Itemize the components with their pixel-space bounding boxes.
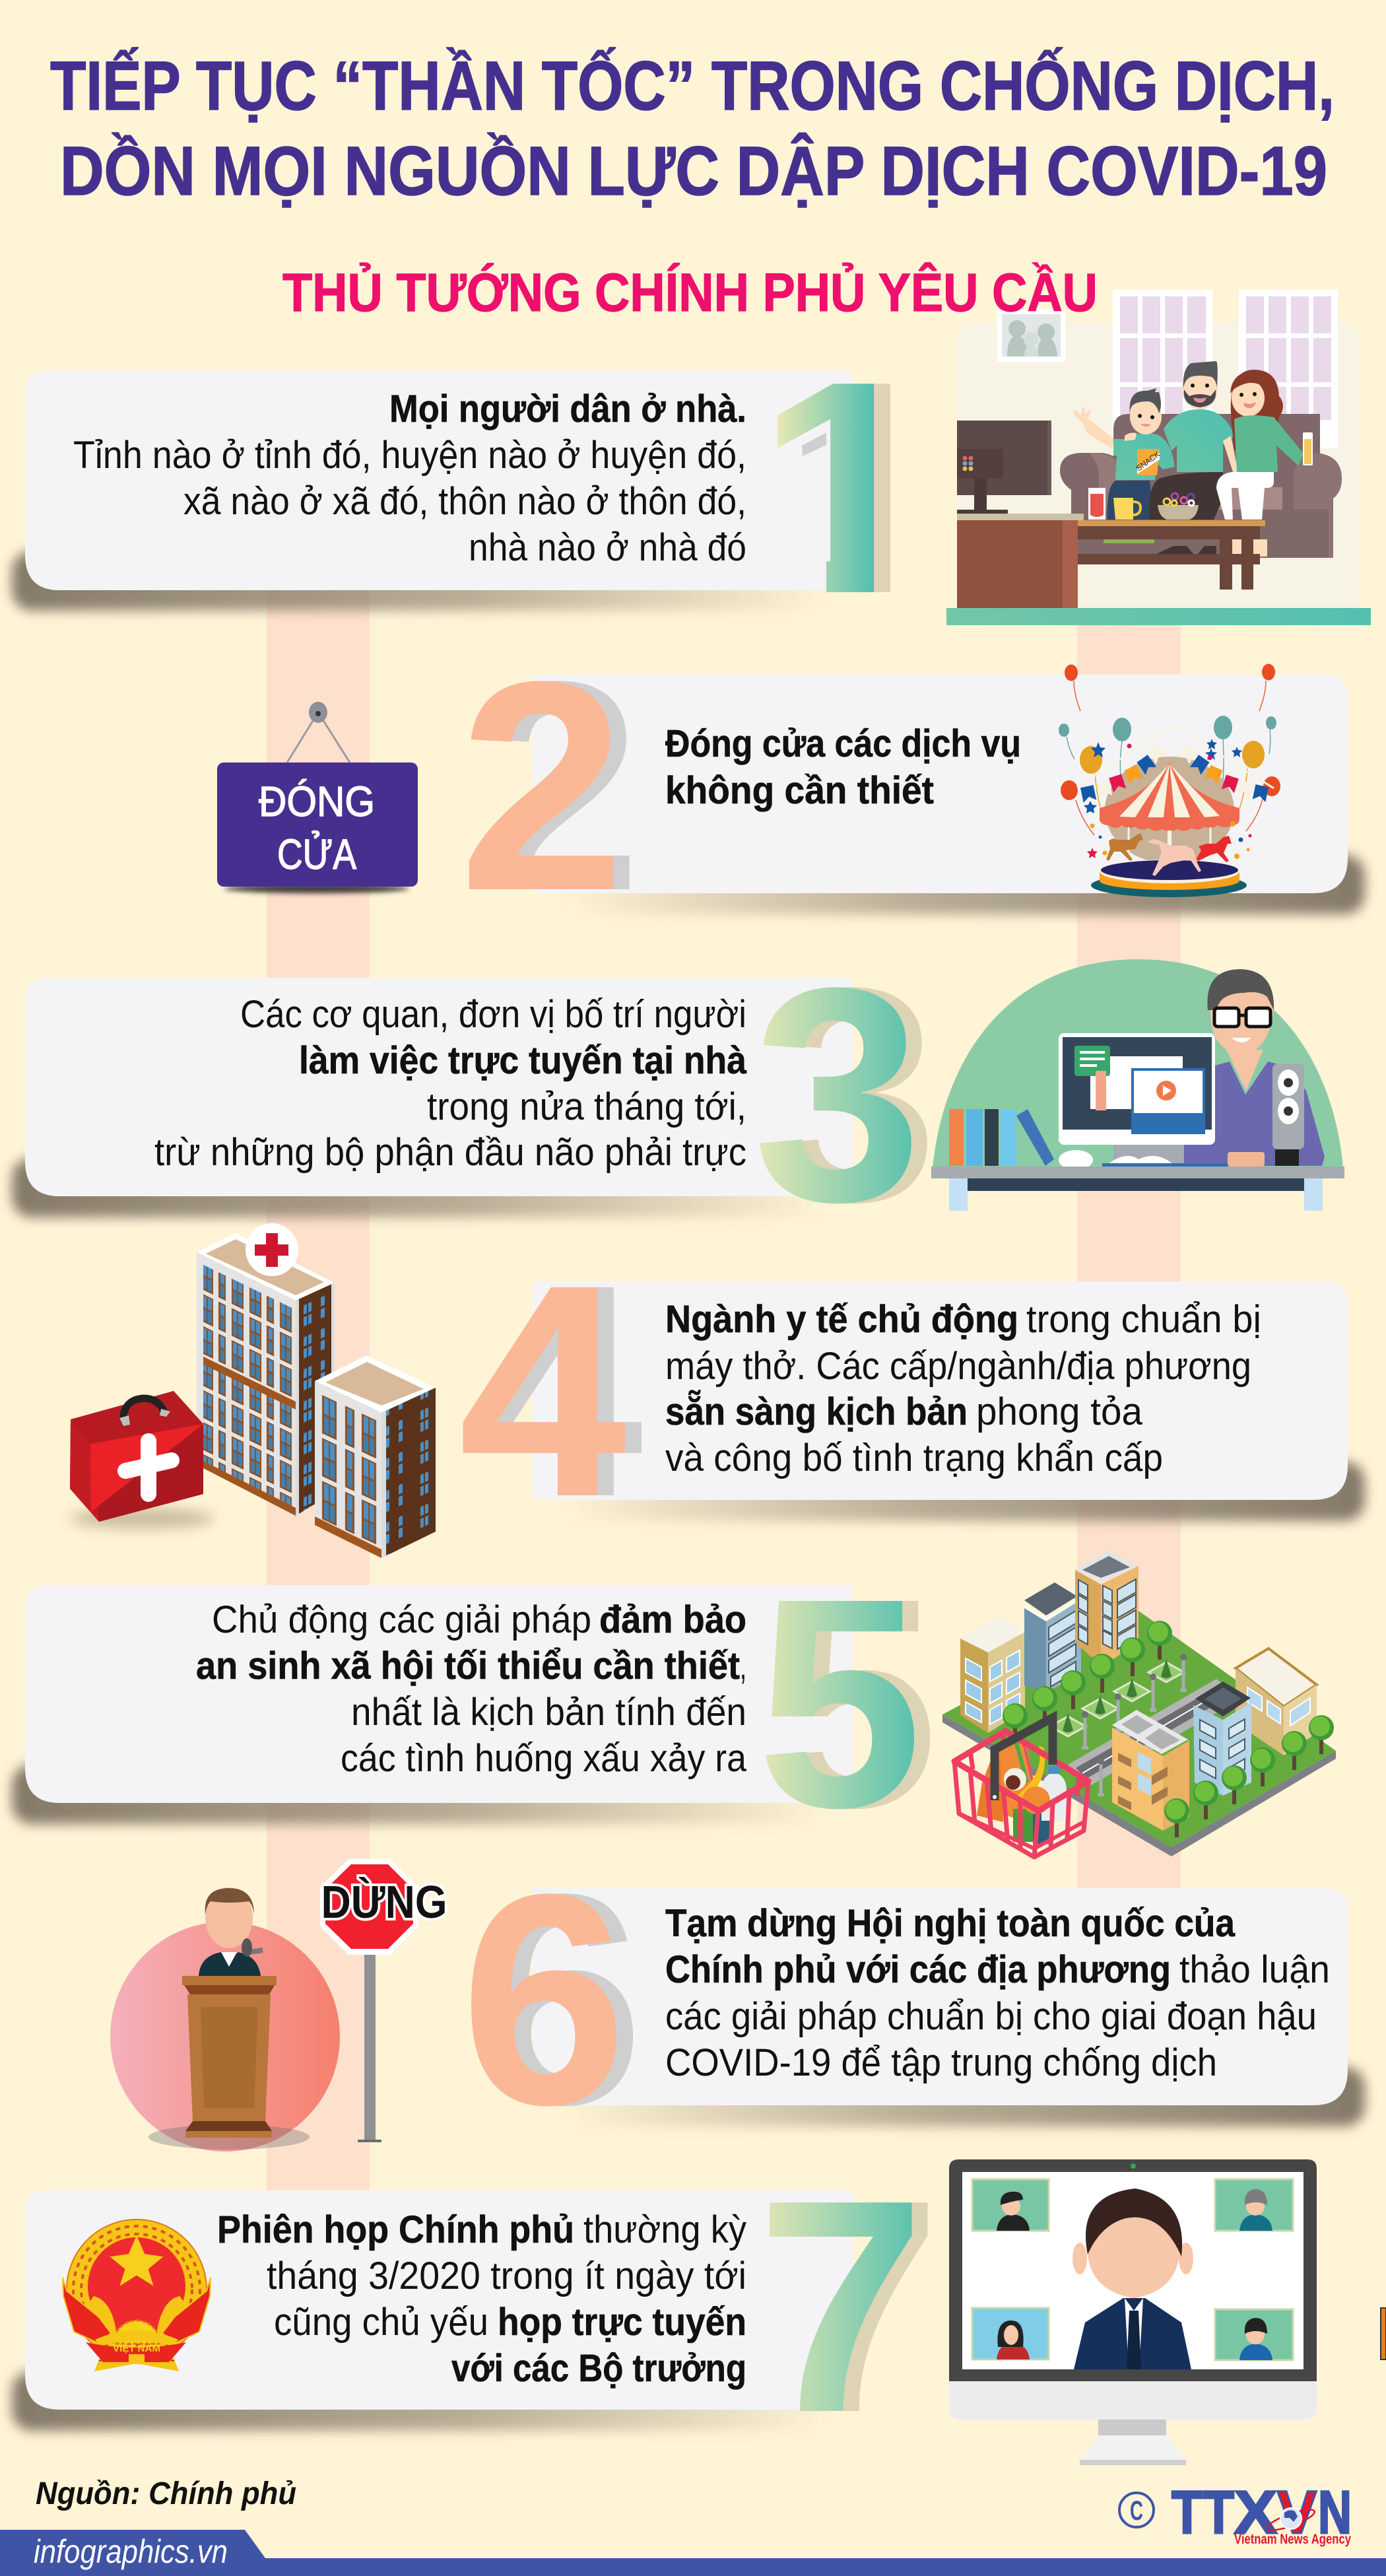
text 7: Phiên họp Chính phủ	[217, 2208, 574, 2251]
text 4: máy thở. Các cấp/ngành/địa phương	[665, 1345, 1251, 1388]
text 6	[665, 1902, 1330, 2084]
icon: stop sign: DỪNG	[321, 1876, 447, 1928]
logo TTXVN: T	[1172, 2479, 1203, 2546]
text 5	[196, 1598, 747, 1780]
logo TTXVN	[1119, 2479, 1352, 2547]
number 2: 2	[459, 619, 625, 953]
number 3: 3	[753, 924, 922, 1265]
text 4: và công bố tình trạng khẩn cấp	[665, 1437, 1163, 1479]
logo TTXVN: N	[1318, 2479, 1352, 2546]
national emblem	[63, 2220, 211, 2371]
text 5: ,	[740, 1644, 746, 1687]
text 1: Tỉnh nào ở tỉnh đó, huyện nào ở huyện đó,	[73, 434, 746, 477]
logo TTXVN: V	[1277, 2479, 1317, 2546]
text 3: làm việc trực tuyến tại nhà	[299, 1039, 747, 1082]
footer band: infographics.vn	[34, 2533, 228, 2570]
subtitle: THỦ TƯỚNG CHÍNH PHỦ YÊU CẦU	[282, 262, 1098, 323]
text 2: Đóng cửa các dịch vụ	[665, 722, 1021, 765]
number 6: 6	[460, 1832, 628, 2167]
text 5: Chủ động các giải pháp	[212, 1598, 591, 1641]
national emblem: VIỆT NAM	[113, 2342, 160, 2354]
number 7: 7	[772, 2137, 941, 2476]
footer band	[0, 2530, 1386, 2576]
icon: stop sign	[320, 1859, 447, 2142]
text 5: nhất là kịch bản tính đến	[351, 1691, 746, 1734]
text 5: đảm bảo	[599, 1598, 746, 1641]
text 5: an sinh xã hội tối thiểu cần thiết	[196, 1644, 740, 1687]
text 7: tháng 3/2020 trong ít ngày tới	[267, 2254, 746, 2297]
icon: speaker at podium	[110, 1887, 340, 2152]
text 2: không cần thiết	[665, 769, 934, 812]
text 6: Chính phủ với các địa phương	[665, 1948, 1171, 1991]
logo TTXVN: Vietnam News Agency	[1234, 2532, 1351, 2547]
number 2: 2	[475, 619, 642, 953]
text 1	[73, 388, 746, 569]
number 4: 4	[459, 1222, 628, 1560]
text 7	[217, 2208, 746, 2390]
number 4: 4	[475, 1222, 645, 1560]
icon: city and shopping basket	[942, 1550, 1336, 1857]
panel 4	[459, 1222, 1365, 1560]
text 1: nhà nào ở nhà đó	[469, 526, 746, 569]
logo TTXVN: T	[1203, 2479, 1234, 2546]
text 4	[665, 1298, 1261, 1479]
text 7: thường kỳ	[583, 2208, 746, 2251]
panel 6	[460, 1832, 1365, 2167]
text 1: Mọi người dân ở nhà.	[389, 388, 746, 430]
connector band right	[1077, 621, 1181, 1891]
text 4: Ngành y tế chủ động	[665, 1298, 1018, 1341]
icon: online worker	[931, 959, 1344, 1211]
illustration: family at home	[946, 290, 1371, 625]
panel 3	[12, 924, 938, 1265]
text 2	[665, 722, 1021, 812]
text 6: COVID-19 để tập trung chống dịch	[665, 2041, 1217, 2084]
text 4: trong chuẩn bị	[1026, 1298, 1261, 1341]
number 5: 5	[772, 1536, 939, 1870]
text 7: với các Bộ trưởng	[451, 2347, 746, 2390]
icon: carousel	[1059, 664, 1280, 897]
number 1	[777, 384, 890, 592]
text 7: họp trực tuyến	[498, 2301, 746, 2344]
text 3: trong nửa tháng tới,	[427, 1085, 746, 1128]
text 3	[154, 993, 747, 1174]
connector band left	[267, 590, 370, 2191]
text 3: trừ những bộ phận đầu não phải trực	[154, 1131, 746, 1174]
text 4: sẵn sàng kịch bản	[665, 1390, 968, 1433]
text 4: phong tỏa	[976, 1390, 1143, 1433]
number 3: 3	[769, 924, 938, 1265]
illustration: family at home: SNACK	[1135, 450, 1162, 473]
logo TTXVN: C	[1130, 2495, 1143, 2526]
text 6: thảo luận	[1179, 1948, 1330, 1991]
panel 1	[3, 371, 890, 619]
icon: closed sign	[217, 702, 418, 893]
number 5: 5	[756, 1536, 923, 1870]
icon: closed sign: ĐÓNG	[259, 778, 375, 825]
icon: video conference monitor	[949, 2159, 1317, 2465]
text 6: các giải pháp chuẩn bị cho giai đoạn hậu	[665, 1995, 1317, 2038]
number 7: 7	[756, 2137, 925, 2476]
number 1: 1	[750, 318, 942, 657]
edge decoration	[1381, 2308, 1386, 2359]
number 1: 1	[766, 318, 958, 657]
number 6: 6	[477, 1832, 644, 2167]
source: Nguồn: Chính phủ	[36, 2476, 296, 2511]
text 1: xã nào ở xã đó, thôn nào ở thôn đó,	[183, 480, 746, 523]
text 5: các tình huống xấu xảy ra	[341, 1737, 747, 1780]
text 6: Tạm dừng Hội nghị toàn quốc của	[665, 1902, 1236, 1945]
panel 5	[12, 1536, 939, 1870]
text 7: cũng chủ yếu	[274, 2301, 488, 2344]
icon: closed sign: CỬA	[277, 830, 356, 878]
panel 7	[12, 2137, 941, 2476]
logo TTXVN: X	[1234, 2479, 1277, 2546]
title	[50, 47, 1335, 210]
icon: hospital and medical kit	[69, 1223, 436, 1558]
text 3: Các cơ quan, đơn vị bố trí người	[240, 993, 746, 1036]
panel 2	[459, 619, 1365, 953]
